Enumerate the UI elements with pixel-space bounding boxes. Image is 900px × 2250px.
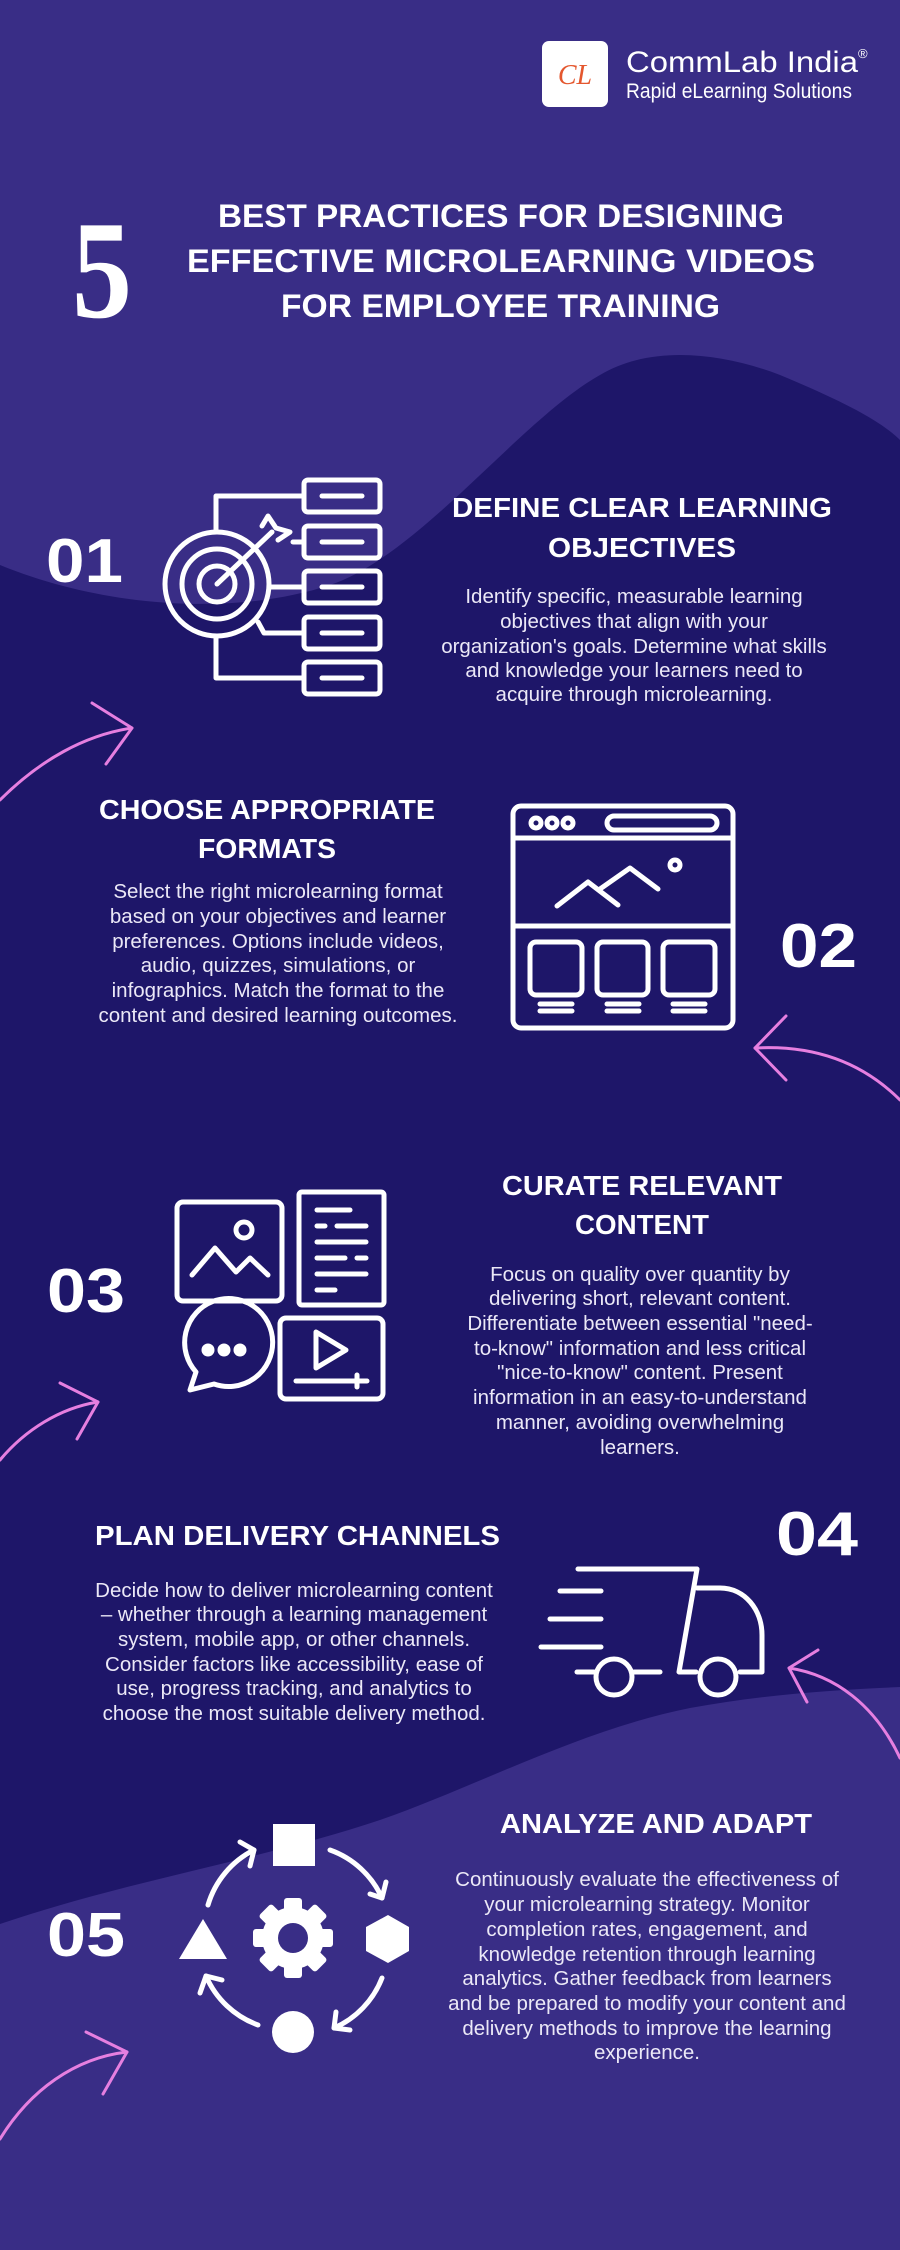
number 02: 02: [780, 912, 857, 981]
body 04: Decide how to deliver microlearning content: [95, 1579, 493, 1602]
heading 05: ANALYZE AND ADAPT: [500, 1808, 812, 1839]
arrow 4: [789, 1650, 900, 1758]
body 02: infographics. Match the format to the: [112, 979, 444, 1002]
body 05: your microlearning strategy. Monitor: [484, 1893, 810, 1916]
body 01: [441, 585, 827, 706]
arrow 3: [0, 1383, 98, 1460]
logo: [542, 41, 868, 107]
icon: content types: [177, 1192, 384, 1399]
title: BEST PRACTICES FOR DESIGNING: [218, 198, 784, 234]
body 04: Consider factors like accessibility, ease of: [105, 1653, 483, 1676]
body 03: Differentiate between essential "need-: [467, 1312, 813, 1335]
body 01: acquire through microlearning.: [496, 683, 772, 706]
arrow 1: [0, 703, 132, 800]
number 01: 01: [46, 527, 123, 596]
body 03: manner, avoiding overwhelming: [496, 1411, 784, 1434]
body 01: Identify specific, measurable learning: [465, 585, 803, 608]
logo: CL: [558, 60, 592, 91]
icon: target with list: [165, 480, 380, 694]
icon: truck: [541, 1569, 762, 1695]
body 05: and be prepared to modify your content and: [448, 1992, 846, 2015]
arrow 5: [0, 2032, 127, 2139]
title number 5: 5: [72, 193, 132, 348]
body 02: audio, quizzes, simulations, or: [141, 954, 415, 977]
body 05: knowledge retention through learning: [478, 1943, 816, 1966]
body 02: preferences. Options include videos,: [112, 930, 444, 953]
heading 03: CURATE RELEVANT: [502, 1170, 782, 1201]
body 04: system, mobile app, or other channels.: [118, 1628, 470, 1651]
heading 01: DEFINE CLEAR LEARNING: [452, 492, 832, 523]
body 03: "nice-to-know" content. Present: [497, 1361, 783, 1384]
number 05: 05: [47, 1901, 125, 1970]
logo: CommLab India: [626, 46, 858, 79]
body 03: learners.: [600, 1436, 680, 1459]
body 05: delivery methods to improve the learning: [462, 2017, 832, 2040]
body 03: Focus on quality over quantity by: [490, 1263, 791, 1286]
heading 02: CHOOSE APPROPRIATE: [99, 794, 435, 825]
heading 02: [99, 794, 435, 864]
number 04: 04: [776, 1500, 859, 1569]
heading 03: CONTENT: [575, 1209, 709, 1240]
body 05: analytics. Gather feedback from learners: [462, 1967, 832, 1990]
body 02: based on your objectives and learner: [110, 905, 446, 928]
body 05: Continuously evaluate the effectiveness of: [455, 1868, 839, 1891]
number 03: 03: [47, 1257, 125, 1326]
body 04: [95, 1579, 493, 1725]
logo: ®: [858, 46, 868, 61]
body 05: completion rates, engagement, and: [486, 1918, 808, 1941]
heading 03: [502, 1170, 782, 1240]
heading 02: FORMATS: [198, 833, 336, 864]
body 03: to-know" information and less critical: [474, 1337, 806, 1360]
body 03: information in an easy-to-understand: [473, 1386, 807, 1409]
body 01: organization's goals. Determine what skills: [441, 635, 827, 658]
body 04: – whether through a learning management: [101, 1603, 487, 1626]
arrow 2: [755, 1016, 900, 1100]
body 05: experience.: [594, 2041, 700, 2064]
title: EFFECTIVE MICROLEARNING VIDEOS: [187, 243, 815, 279]
heading 04: PLAN DELIVERY CHANNELS: [95, 1520, 500, 1551]
body 04: choose the most suitable delivery method.: [103, 1702, 485, 1725]
body 02: Select the right microlearning format: [113, 880, 443, 903]
body 03: [467, 1263, 813, 1459]
heading 01: OBJECTIVES: [548, 532, 736, 563]
body 03: delivering short, relevant content.: [489, 1287, 791, 1310]
title: [187, 198, 815, 324]
heading 01: [452, 492, 832, 563]
body 02: content and desired learning outcomes.: [99, 1004, 457, 1027]
body 01: and knowledge your learners need to: [465, 659, 803, 682]
title: FOR EMPLOYEE TRAINING: [281, 288, 720, 324]
icon: browser: [513, 806, 733, 1028]
body 02: [99, 880, 457, 1027]
body 01: objectives that align with your: [500, 610, 768, 633]
logo: Rapid eLearning Solutions: [626, 80, 852, 103]
body 05: [448, 1868, 846, 2064]
icon: analyze cycle: [179, 1824, 409, 2053]
body 04: use, progress tracking, and analytics to: [116, 1677, 472, 1700]
